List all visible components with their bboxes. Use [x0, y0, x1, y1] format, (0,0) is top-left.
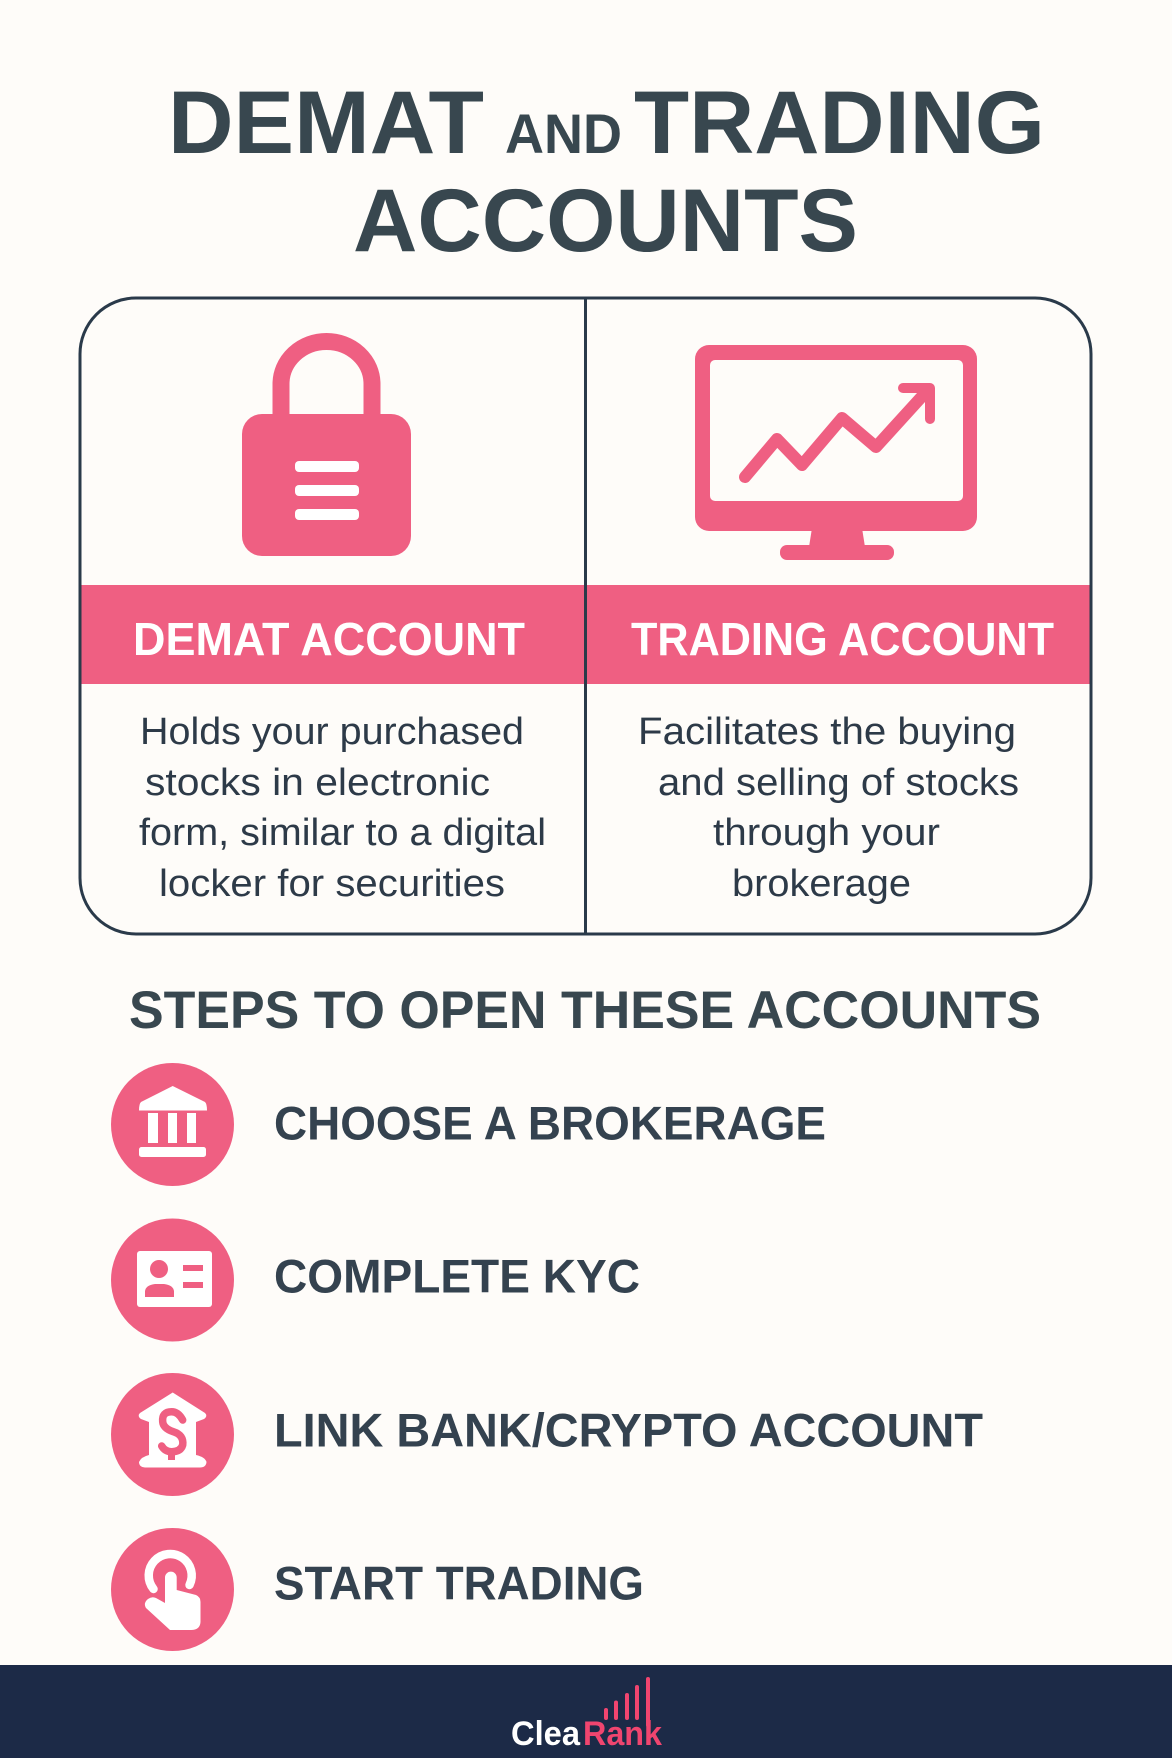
- title: DEMAT: [168, 72, 484, 172]
- title: ACCOUNTS: [353, 170, 858, 270]
- step 1: choose a brokerage: [111, 1063, 826, 1186]
- pink header bands: [81, 585, 1090, 684]
- icon: id card: [111, 1218, 234, 1342]
- text: demat description: [139, 711, 546, 905]
- text: trading description: and selling of stocks: [658, 762, 1019, 804]
- logo: clearank: Rank: [583, 1715, 662, 1753]
- icon: bank with dollar: [111, 1373, 234, 1496]
- heading: steps: STEPS TO OPEN THESE ACCOUNTS: [129, 981, 1041, 1040]
- label: COMPLETE KYC: [274, 1250, 640, 1302]
- icon: padlock: [242, 342, 411, 556]
- step 4: start trading: [111, 1528, 644, 1651]
- title: [168, 72, 1045, 270]
- text: demat description: locker for securities: [159, 863, 505, 905]
- logo: clearank: [511, 1677, 662, 1753]
- heading: demat account: DEMAT ACCOUNT: [133, 613, 525, 665]
- text: trading description: through your: [713, 812, 940, 854]
- icon: monitor with rising chart: [695, 345, 977, 560]
- label: CHOOSE A BROKERAGE: [274, 1096, 826, 1150]
- label: START TRADING: [274, 1556, 644, 1610]
- icon: bank: [111, 1063, 234, 1186]
- heading: trading account: TRADING ACCOUNT: [631, 613, 1054, 665]
- text: demat description: stocks in electronic: [145, 762, 490, 804]
- footer bar: [0, 1665, 1172, 1758]
- text: trading description: brokerage: [732, 863, 911, 905]
- icon: tapping hand: [111, 1528, 234, 1651]
- title: TRADING: [634, 72, 1045, 172]
- text: demat description: Holds your purchased: [140, 711, 524, 753]
- panel: account comparison card: [80, 298, 1091, 934]
- step 2: complete kyc: [111, 1218, 640, 1342]
- label: LINK BANK/CRYPTO ACCOUNT: [274, 1404, 983, 1456]
- text: trading description: [638, 711, 1019, 905]
- logo: clearank: Clea: [511, 1715, 581, 1753]
- step 3: link bank/crypto account: [111, 1373, 983, 1496]
- text: trading description: Facilitates the buying: [638, 711, 1016, 753]
- text: demat description: form, similar to a digital: [139, 812, 546, 854]
- title: AND: [505, 102, 622, 165]
